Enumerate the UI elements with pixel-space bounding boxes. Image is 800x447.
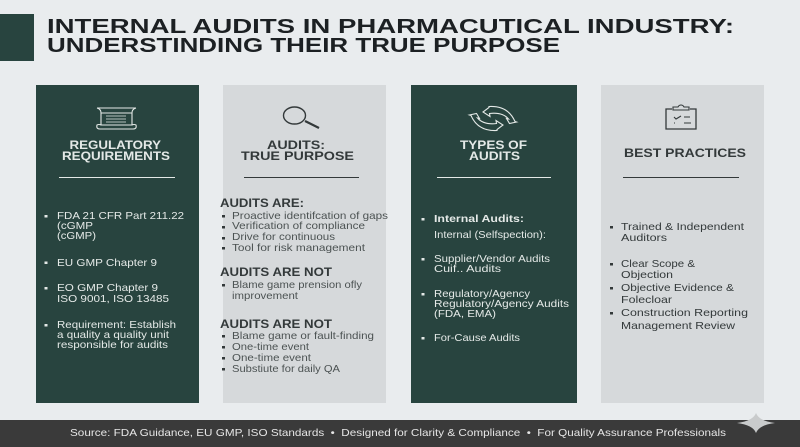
list: best practices: Folecloar xyxy=(621,294,673,306)
heading: audits true purpose: TRUE PURPOSE xyxy=(241,151,354,163)
title: UNDERSTINDING THEIR TRUE PURPOSE xyxy=(47,34,560,57)
title xyxy=(47,15,734,57)
list: audit types: Internal Audits: xyxy=(434,213,524,225)
list: audits are: Drive for continuous xyxy=(232,231,335,243)
list: audits are: Verification of compliance xyxy=(232,220,365,232)
list: audits are not, first: AUDITS ARE NOT xyxy=(220,267,332,279)
list: audits are not, first: improvement xyxy=(232,290,298,302)
heading: regulatory requirements xyxy=(62,140,170,163)
list: audit types: For-Cause Audits xyxy=(434,332,520,344)
list: regulations: FDA 21 CFR Part 211.22 xyxy=(57,210,184,222)
list: audit types: Supplier/Vendor Audits xyxy=(434,253,550,265)
list: audit types: (FDA, EMA) xyxy=(434,308,496,320)
list: regulations: (cGMP xyxy=(57,220,93,232)
icon: sparkle star xyxy=(737,413,775,433)
panel: regulatory requirements xyxy=(36,85,199,403)
list: audits are not, second: One-time event xyxy=(232,352,311,364)
list: best practices: Management Review xyxy=(621,320,735,332)
heading: types of audits: AUDITS xyxy=(469,151,520,163)
list: audits are not, second: AUDITS ARE NOT xyxy=(220,319,332,331)
list: best practices: Construction Reporting xyxy=(621,307,748,319)
list: audits are: Tool for risk management xyxy=(232,242,365,254)
list: audits are not, second: One-time event xyxy=(232,341,309,353)
list: regulations: a quality a quality unit xyxy=(57,329,169,341)
list: regulations: ISO 9001, ISO 13485 xyxy=(57,293,169,305)
list: audit types: Regulatory/Agency xyxy=(434,288,531,300)
list: audit types xyxy=(422,213,569,344)
heading: regulatory requirements: REQUIREMENTS xyxy=(62,151,170,163)
title: INTERNAL AUDITS IN PHARMACUTICAL INDUSTRY: xyxy=(47,15,734,38)
list: audits are xyxy=(220,198,388,254)
heading: audits true purpose xyxy=(241,140,354,163)
icon: clipboard checklist xyxy=(666,105,696,129)
title accent block xyxy=(0,14,34,61)
list: best practices: Trained & Independent xyxy=(621,221,744,233)
list: audit types: Regulatory/Agency Audits xyxy=(434,298,569,310)
list: best practices: Objection xyxy=(621,269,673,281)
panel: best practices xyxy=(601,85,764,403)
list: audits are: Proactive identifcation of gaps xyxy=(232,210,388,222)
list: audit types: Internal (Selfspection): xyxy=(434,229,546,241)
list: best practices: Auditors xyxy=(621,232,667,244)
list: audits are not, second xyxy=(220,319,374,375)
heading: audits true purpose: AUDITS: xyxy=(267,140,325,152)
icon: scroll xyxy=(97,108,136,129)
heading: best practices: BEST PRACTICES xyxy=(624,148,746,160)
list: best practices: Clear Scope & xyxy=(621,258,695,270)
list: audits are not, second: Blame game or fault-finding xyxy=(232,330,374,342)
list: audits are not, first xyxy=(220,267,363,302)
list: audits are: AUDITS ARE: xyxy=(220,198,304,210)
panel: types of audits xyxy=(411,85,577,403)
heading: types of audits xyxy=(460,140,527,163)
list: regulations: EU GMP Chapter 9 xyxy=(57,257,157,269)
heading: regulatory requirements: REGULATORY xyxy=(70,140,161,152)
icon: magnifying glass xyxy=(284,107,319,128)
footer text: Source: FDA Guidance, EU GMP, ISO Standards • Designed for Clarity & Compliance • For Quality Assurance Professionals xyxy=(70,427,726,439)
list: regulations: (cGMP) xyxy=(57,230,96,242)
list: regulations: Requirement: Establish xyxy=(57,319,176,331)
list: regulations: EO GMP Chapter 9 xyxy=(57,282,158,294)
list: regulations: responsible for audits xyxy=(57,339,168,351)
list: audits are not, first: Blame game prension ofly xyxy=(232,279,363,291)
heading: types of audits: TYPES OF xyxy=(460,140,527,152)
list: best practices: Objective Evidence & xyxy=(621,282,734,294)
footer bar xyxy=(0,420,800,447)
panel: audits true purpose xyxy=(220,85,388,403)
list: best practices xyxy=(610,221,748,332)
list: audit types: Cuif.. Audits xyxy=(434,263,501,275)
icon: cycle arrows xyxy=(470,106,516,131)
list: audits are not, second: Substiute for daily QA xyxy=(232,363,340,375)
list: regulations xyxy=(44,210,184,351)
